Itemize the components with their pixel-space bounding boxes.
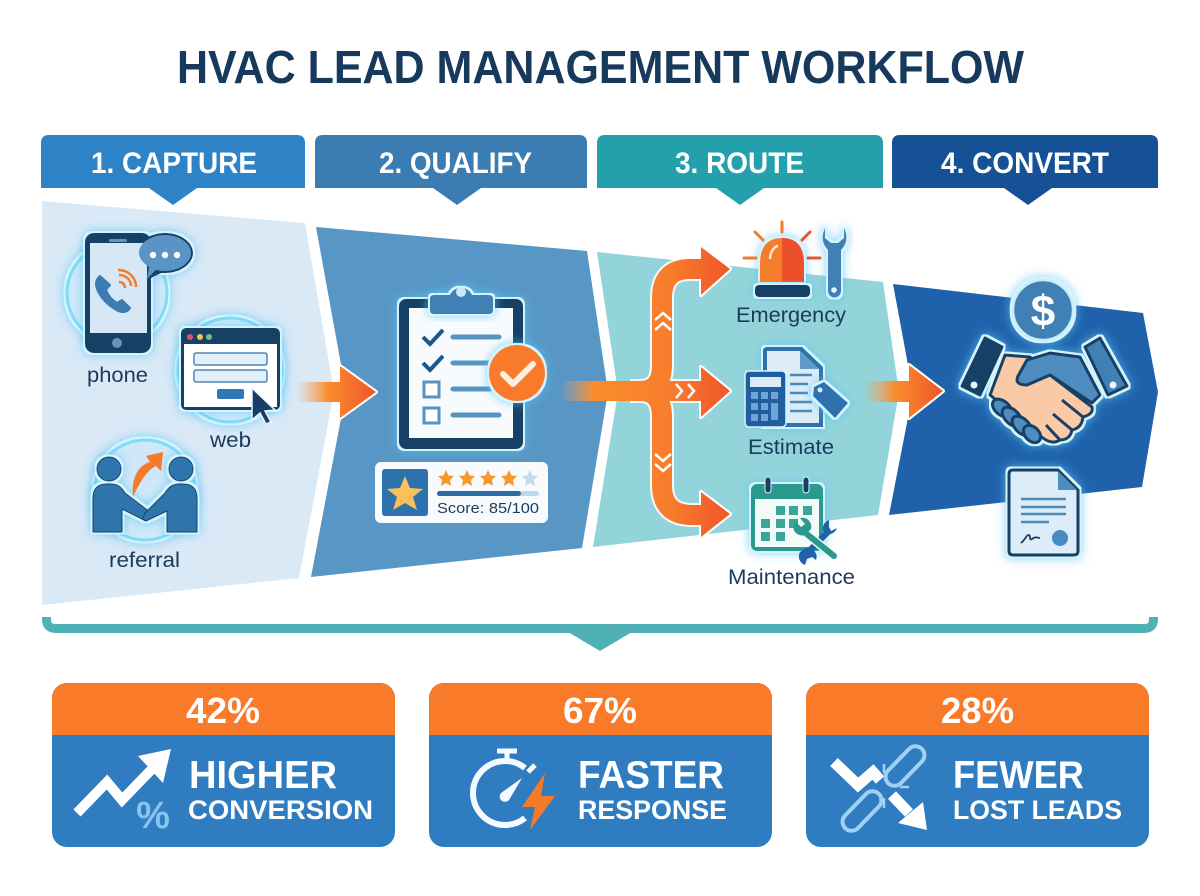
chevrons	[655, 313, 694, 471]
title: HVAC LEAD MANAGEMENT WORKFLOW	[177, 41, 1025, 93]
stat card: faster response: FASTER	[578, 754, 724, 797]
icon: referral	[93, 440, 197, 540]
stat card: faster response: RESPONSE	[578, 795, 727, 825]
icon: signed contract	[1009, 470, 1078, 555]
icon: star	[387, 476, 423, 510]
stat card: higher conversion	[52, 683, 395, 847]
icon: dollar coin	[1013, 280, 1073, 340]
icon: maintenance calendar	[751, 477, 837, 565]
icon: estimate calculator and document	[745, 347, 848, 427]
stat card: higher conversion: HIGHER	[189, 754, 337, 797]
label: maintenance: Maintenance	[728, 566, 855, 589]
step header: 2. Qualify	[315, 135, 587, 205]
icon: phone	[67, 233, 193, 353]
panel: route	[593, 252, 899, 547]
icon: emergency siren and wrench	[744, 222, 846, 297]
icon: rising arrow	[77, 749, 171, 837]
stat card: fewer lost leads: FEWER	[953, 754, 1084, 797]
icon: stopwatch with bolt	[473, 751, 555, 830]
panel: convert	[889, 284, 1158, 515]
icon: web form	[178, 318, 282, 424]
stat card: fewer lost leads: 28%	[941, 690, 1014, 731]
panel: qualify	[311, 227, 608, 577]
step header: 1. Capture: 1. CAPTURE	[91, 147, 257, 180]
label: emergency: Emergency	[736, 304, 847, 327]
step header: 4. Convert	[892, 135, 1158, 205]
arrow: route to convert	[863, 365, 943, 418]
stat card: faster response	[429, 683, 772, 847]
label: referral: referral	[109, 549, 180, 572]
step header: 3. Route: 3. ROUTE	[675, 147, 804, 180]
stat card: faster response: 67%	[563, 690, 637, 731]
step header: 4. Convert: 4. CONVERT	[941, 147, 1109, 180]
step header: 1. Capture	[41, 135, 305, 205]
icon: handshake	[962, 338, 1127, 446]
stat card: fewer lost leads: LOST LEADS	[953, 795, 1122, 825]
icon: dollar coin: $	[1031, 287, 1055, 336]
label: phone: phone	[87, 364, 148, 387]
arrow: routing branches	[562, 247, 730, 537]
label: estimate: Estimate	[748, 436, 834, 459]
icon: clipboard checklist	[399, 287, 545, 449]
icon: broken chain and falling arrow	[834, 742, 928, 835]
summary bracket	[46, 617, 1154, 651]
label: web: web	[209, 429, 251, 452]
step header: 2. Qualify: 2. QUALIFY	[379, 147, 532, 180]
score text: Score: 85/100	[437, 500, 539, 517]
score bar	[437, 491, 539, 496]
star rating	[438, 470, 538, 486]
step header: 3. Route	[597, 135, 883, 205]
stat card: fewer lost leads	[806, 683, 1149, 847]
arrow: capture to qualify	[296, 366, 376, 418]
panel: capture	[42, 201, 334, 605]
stat card: higher conversion: CONVERSION	[188, 795, 373, 825]
icon: rising arrow: %	[136, 795, 170, 837]
score card	[375, 462, 548, 523]
stat card: higher conversion: 42%	[186, 690, 260, 731]
